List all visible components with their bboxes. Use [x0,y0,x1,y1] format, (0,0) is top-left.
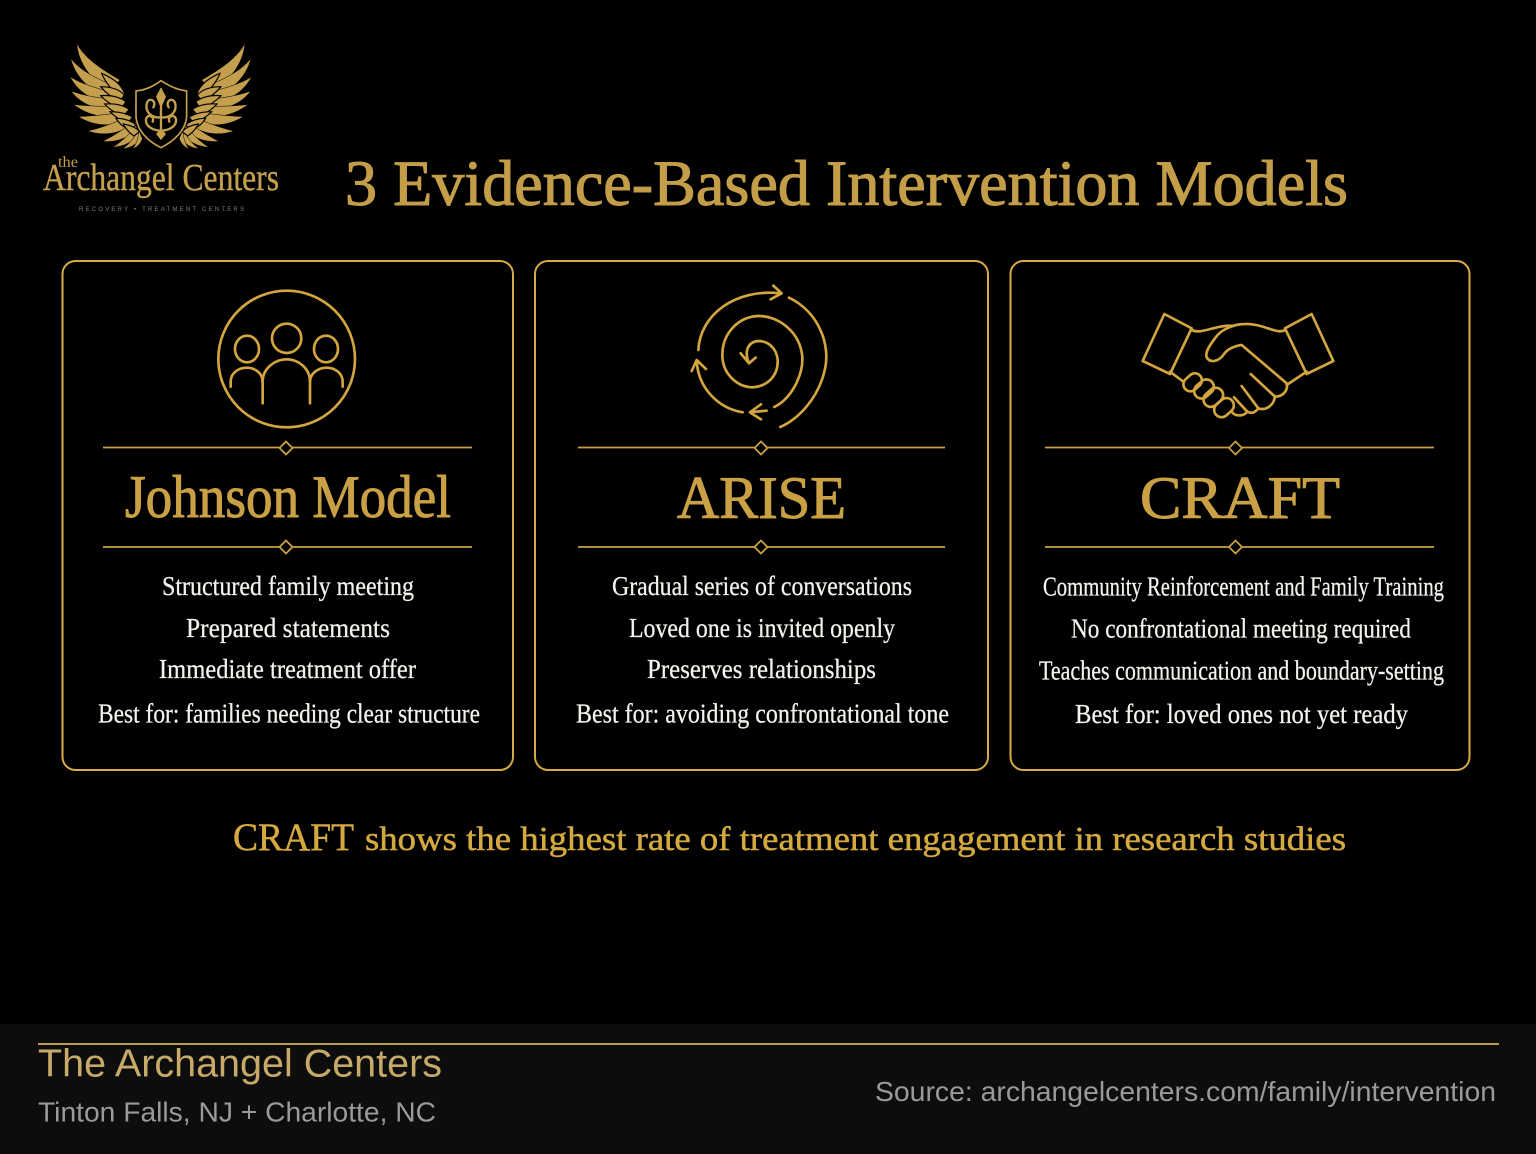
icon: winged shield [70,43,252,149]
divider [103,540,472,554]
panel: CRAFT [1010,261,1470,770]
text block: CRAFT details: No confrontational meeting required [1071,614,1411,644]
icon: spiral with arrows [692,286,826,427]
icon: handshake [1143,314,1333,420]
footer organisation name: The Archangel Centers [38,1042,442,1086]
text block: ARISE details: Preserves relationships [647,654,876,684]
icon: group of people in circle [218,291,355,427]
text block: CRAFT details: Teaches communication and boundary-setting [1039,656,1444,686]
callout: CRAFT research finding: shows the highest rate of treatment engagement in research studies [365,821,1346,858]
divider [578,442,945,454]
footer rule [38,1043,1499,1045]
footer [0,1024,1536,1154]
divider [578,540,945,554]
footer source: Source: archangelcenters.com/family/intervention [875,1076,1496,1107]
logo wordmark: the: the [58,154,78,171]
footer locations: Tinton Falls, NJ + Charlotte, NC [38,1096,436,1128]
divider [103,442,472,454]
divider [1045,442,1434,454]
text block: ARISE details: Best for: avoiding confrontational tone [576,698,949,728]
text block: Johnson Model details: Prepared statements [186,613,390,643]
logo wordmark: Archangel Centers: Archangel Centers [43,157,279,199]
divider [1045,540,1434,554]
text block: CRAFT details [1039,572,1444,729]
text block: ARISE details [576,571,949,728]
title: 3 Evidence-Based Intervention Models [345,148,1348,220]
heading: ARISE: ARISE [677,465,846,531]
text block: Johnson Model details [98,571,480,728]
heading: CRAFT: CRAFT [1140,465,1340,531]
text block: Johnson Model details: Structured family meeting [162,571,414,601]
callout: CRAFT research finding: CRAFT [233,816,354,859]
logo: The Archangel Centers [43,43,279,213]
panel: ARISE [535,261,988,770]
text block: Johnson Model details: Immediate treatment offer [159,654,416,684]
text block: Johnson Model details: Best for: families needing clear structure [98,698,480,728]
heading: Johnson Model: Johnson Model [125,464,451,530]
text block: ARISE details: Gradual series of conversations [612,571,912,601]
panel border [535,261,988,770]
panel: Johnson Model [62,261,513,770]
footer background [0,1024,1536,1154]
panel border [1010,261,1470,770]
text block: CRAFT details: Best for: loved ones not yet ready [1075,699,1408,729]
text block: ARISE details: Loved one is invited openly [629,613,895,643]
panel border [62,261,513,770]
logo tagline: RECOVERY • TREATMENT CENTERS [79,207,244,213]
